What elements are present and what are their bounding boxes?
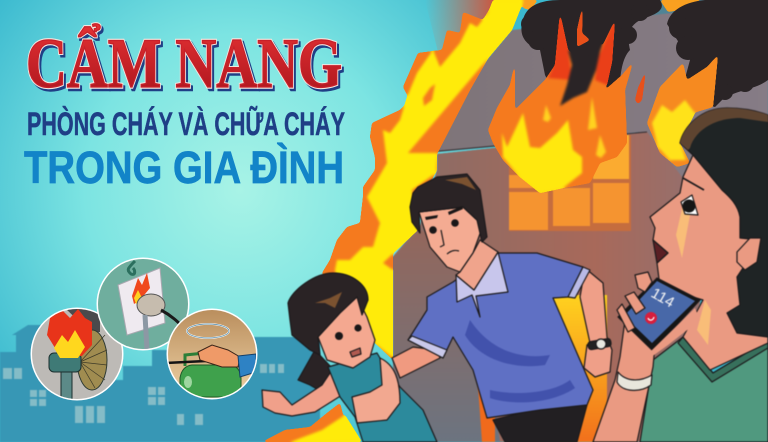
girl left arm (262, 370, 342, 416)
icon: burning electric fan (30, 308, 124, 404)
little girl (262, 273, 437, 442)
man shirt (408, 253, 593, 418)
man left arm (392, 347, 440, 378)
red fire glow (425, 0, 500, 60)
title: cam nang: CẨM NANG (28, 24, 344, 106)
glowing doorway (553, 295, 607, 442)
man right arm with watch (580, 268, 612, 377)
call button (645, 312, 657, 324)
mother (593, 108, 768, 442)
man hair (410, 174, 487, 242)
mother open mouth (653, 240, 668, 263)
far right sky (600, 0, 768, 140)
phone number: 114 (648, 285, 677, 311)
title: household: TRONG GIA ĐÌNH (24, 142, 344, 193)
running man (392, 174, 612, 442)
subtitle: PHÒNG CHÁY VÀ CHỮA CHÁY (27, 106, 345, 142)
icon: burning electric socket (96, 258, 190, 352)
roof fire (262, 0, 702, 442)
mother eye (681, 195, 698, 215)
man collar (456, 252, 508, 317)
right flame (647, 55, 718, 167)
black smoke (521, 0, 768, 107)
title: cam nang: CẨM NANG (26, 22, 342, 103)
icon: gas cylinder valve (166, 308, 258, 400)
title: cam nang: CẨM NANG (26, 22, 342, 103)
big flame (488, 3, 646, 193)
girl near arm and hand (352, 358, 400, 423)
girl dress (328, 353, 437, 442)
window (509, 135, 631, 231)
bracelet (617, 372, 652, 390)
burning house (383, 13, 768, 442)
man face (419, 207, 482, 272)
girl face (318, 297, 375, 368)
mother shirt (640, 337, 768, 442)
fingers (617, 272, 652, 332)
man legs (493, 403, 587, 442)
mother ear (737, 238, 761, 270)
girl hair (288, 273, 368, 355)
girl back hair (298, 350, 332, 392)
mother hair (680, 108, 768, 337)
mother arm (593, 320, 655, 442)
mother neck and face (650, 155, 768, 370)
city skyline (0, 325, 320, 442)
phone (618, 278, 700, 351)
people (262, 108, 768, 442)
